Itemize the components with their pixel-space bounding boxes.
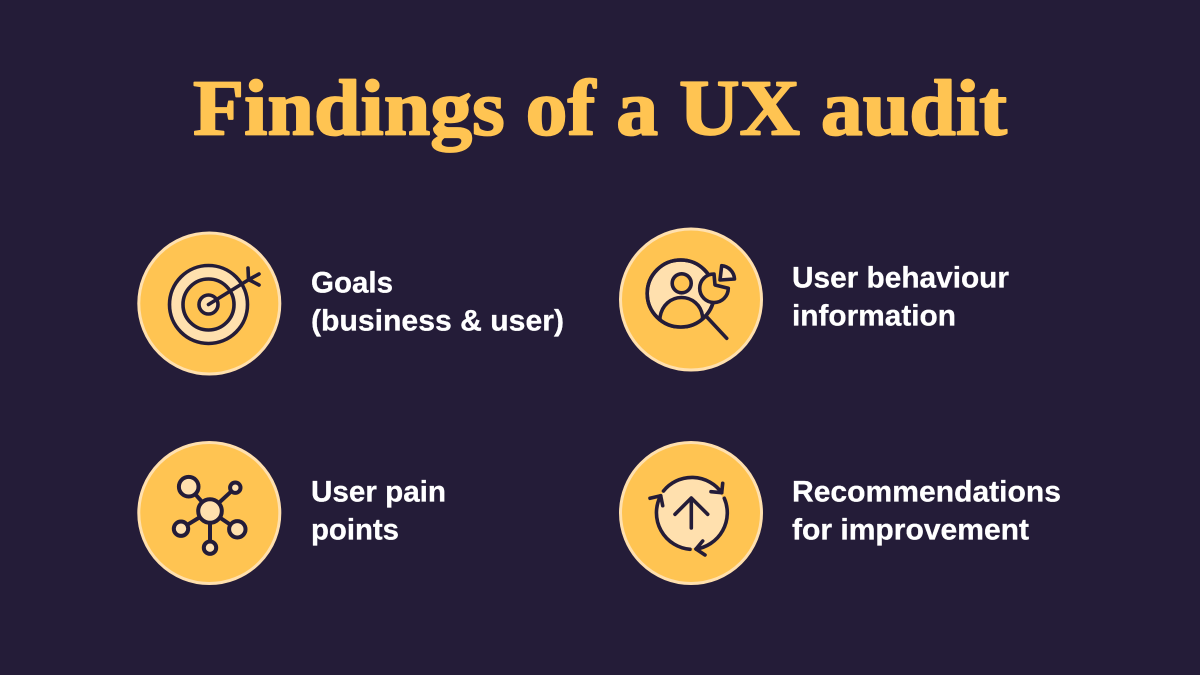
text: goals label: (business & user) bbox=[311, 304, 564, 338]
icon: network nodes bbox=[139, 442, 280, 584]
icon: target bbox=[139, 233, 280, 374]
text: goals label: Goals bbox=[311, 266, 393, 300]
icon: circular arrows with up arrow bbox=[620, 442, 762, 584]
text: user behaviour label bbox=[792, 262, 1010, 332]
panel: recommendations bbox=[620, 442, 1061, 584]
text: recommendations label bbox=[792, 476, 1061, 546]
text: user behaviour label: information bbox=[792, 300, 956, 332]
text: user behaviour label: User behaviour bbox=[792, 262, 1010, 294]
panel: goals bbox=[139, 233, 564, 374]
text: recommendations label: for improvement bbox=[792, 514, 1029, 546]
text: goals label bbox=[311, 266, 564, 338]
text: recommendations label: Recommendations bbox=[792, 476, 1061, 508]
text: user pain points label: User pain bbox=[311, 476, 446, 508]
text: user pain points label bbox=[311, 476, 446, 546]
icon: user search with pie chart bbox=[620, 229, 762, 370]
panel: user pain points bbox=[139, 442, 446, 584]
panel: user behaviour bbox=[620, 229, 1010, 370]
text: user pain points label: points bbox=[311, 514, 399, 546]
title: Findings of a UX audit bbox=[193, 66, 1007, 152]
